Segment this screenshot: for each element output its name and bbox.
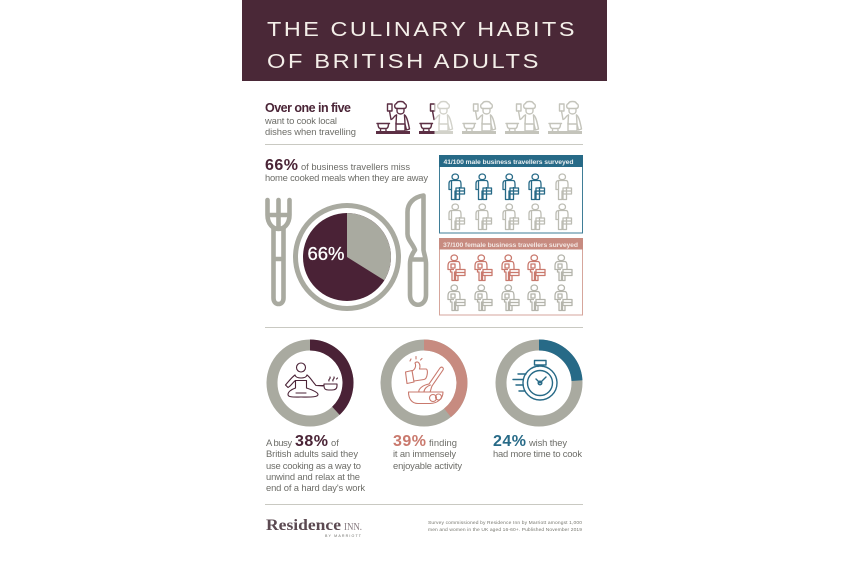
text: 39 percent: it an immensely [393, 448, 456, 459]
panel: female travellers: 37/100 female business travellers surveyed [443, 242, 578, 249]
female icons [448, 255, 572, 310]
text: 38 percent: unwind and relax at the [266, 471, 360, 482]
text: 39 percent [393, 433, 462, 471]
stat: over one in five: want to cook local [264, 115, 337, 126]
text: 38 percent: use cooking as a way to [266, 460, 361, 471]
logo: Residence Inn: Residence [266, 517, 341, 534]
title banner [242, 0, 607, 81]
text: 39 percent: finding [429, 437, 457, 448]
chart: plate pie 66 percent: 66% [308, 243, 344, 264]
chart: donut 39 percent [386, 345, 462, 421]
text: 38 percent: of [331, 437, 339, 448]
text: 39 percent: enjoyable activity [393, 460, 462, 471]
panel: male travellers [439, 155, 583, 233]
stat: 66 percent miss home cooked meals: of business travellers miss [301, 161, 410, 172]
stat: over one in five: Over one in five [265, 101, 351, 115]
stat: 66 percent miss home cooked meals: home cooked meals when they are away [265, 172, 428, 183]
logo: Residence Inn: BY MARRIOTT [325, 534, 362, 538]
panel: male travellers: 41/100 male business travellers surveyed [444, 159, 574, 166]
stat: over one in five [264, 101, 356, 137]
chart: plate pie 66 percent [296, 206, 398, 308]
icon: thumbs up and whisk bowl [406, 356, 443, 404]
stat: 66 percent miss home cooked meals: 66% [265, 157, 298, 174]
text: 24 percent: wish they [528, 437, 567, 448]
text: 38 percent [266, 433, 365, 493]
text: 24 percent [493, 433, 582, 459]
footnote [428, 520, 582, 533]
title banner: OF BRITISH ADULTS [267, 51, 541, 73]
logo: Residence Inn: INN. [344, 521, 362, 533]
logo: Residence Inn [266, 517, 362, 538]
footnote: men and women in the UK aged 16-60+. Published November 2019 [428, 527, 582, 533]
icon: stopwatch [513, 360, 557, 400]
panel: female travellers [439, 238, 583, 315]
text: 38 percent: end of a hard day's work [266, 482, 365, 493]
text: 24 percent: had more time to cook [493, 448, 582, 459]
chart: donut 38 percent [272, 345, 348, 421]
chart: donut 24 percent [501, 345, 577, 421]
icon: fork [268, 200, 290, 304]
icon: meditating cook [286, 363, 338, 397]
text: 24 percent: 24% [493, 433, 526, 450]
text: 38 percent: 38% [295, 433, 328, 450]
male icons [449, 174, 572, 230]
stat: over one in five: dishes when travelling [265, 126, 356, 137]
title banner: THE CULINARY HABITS [267, 19, 577, 41]
text: 38 percent: British adults said they [266, 448, 358, 459]
chef icon row [376, 102, 582, 134]
text: 38 percent: A busy [266, 437, 292, 448]
footnote: Survey commissioned by Residence Inn by Marriott amongst 1,000 [428, 520, 582, 526]
text: 39 percent: 39% [393, 433, 426, 450]
stat: 66 percent miss home cooked meals [265, 157, 428, 183]
icon: knife [408, 196, 426, 305]
